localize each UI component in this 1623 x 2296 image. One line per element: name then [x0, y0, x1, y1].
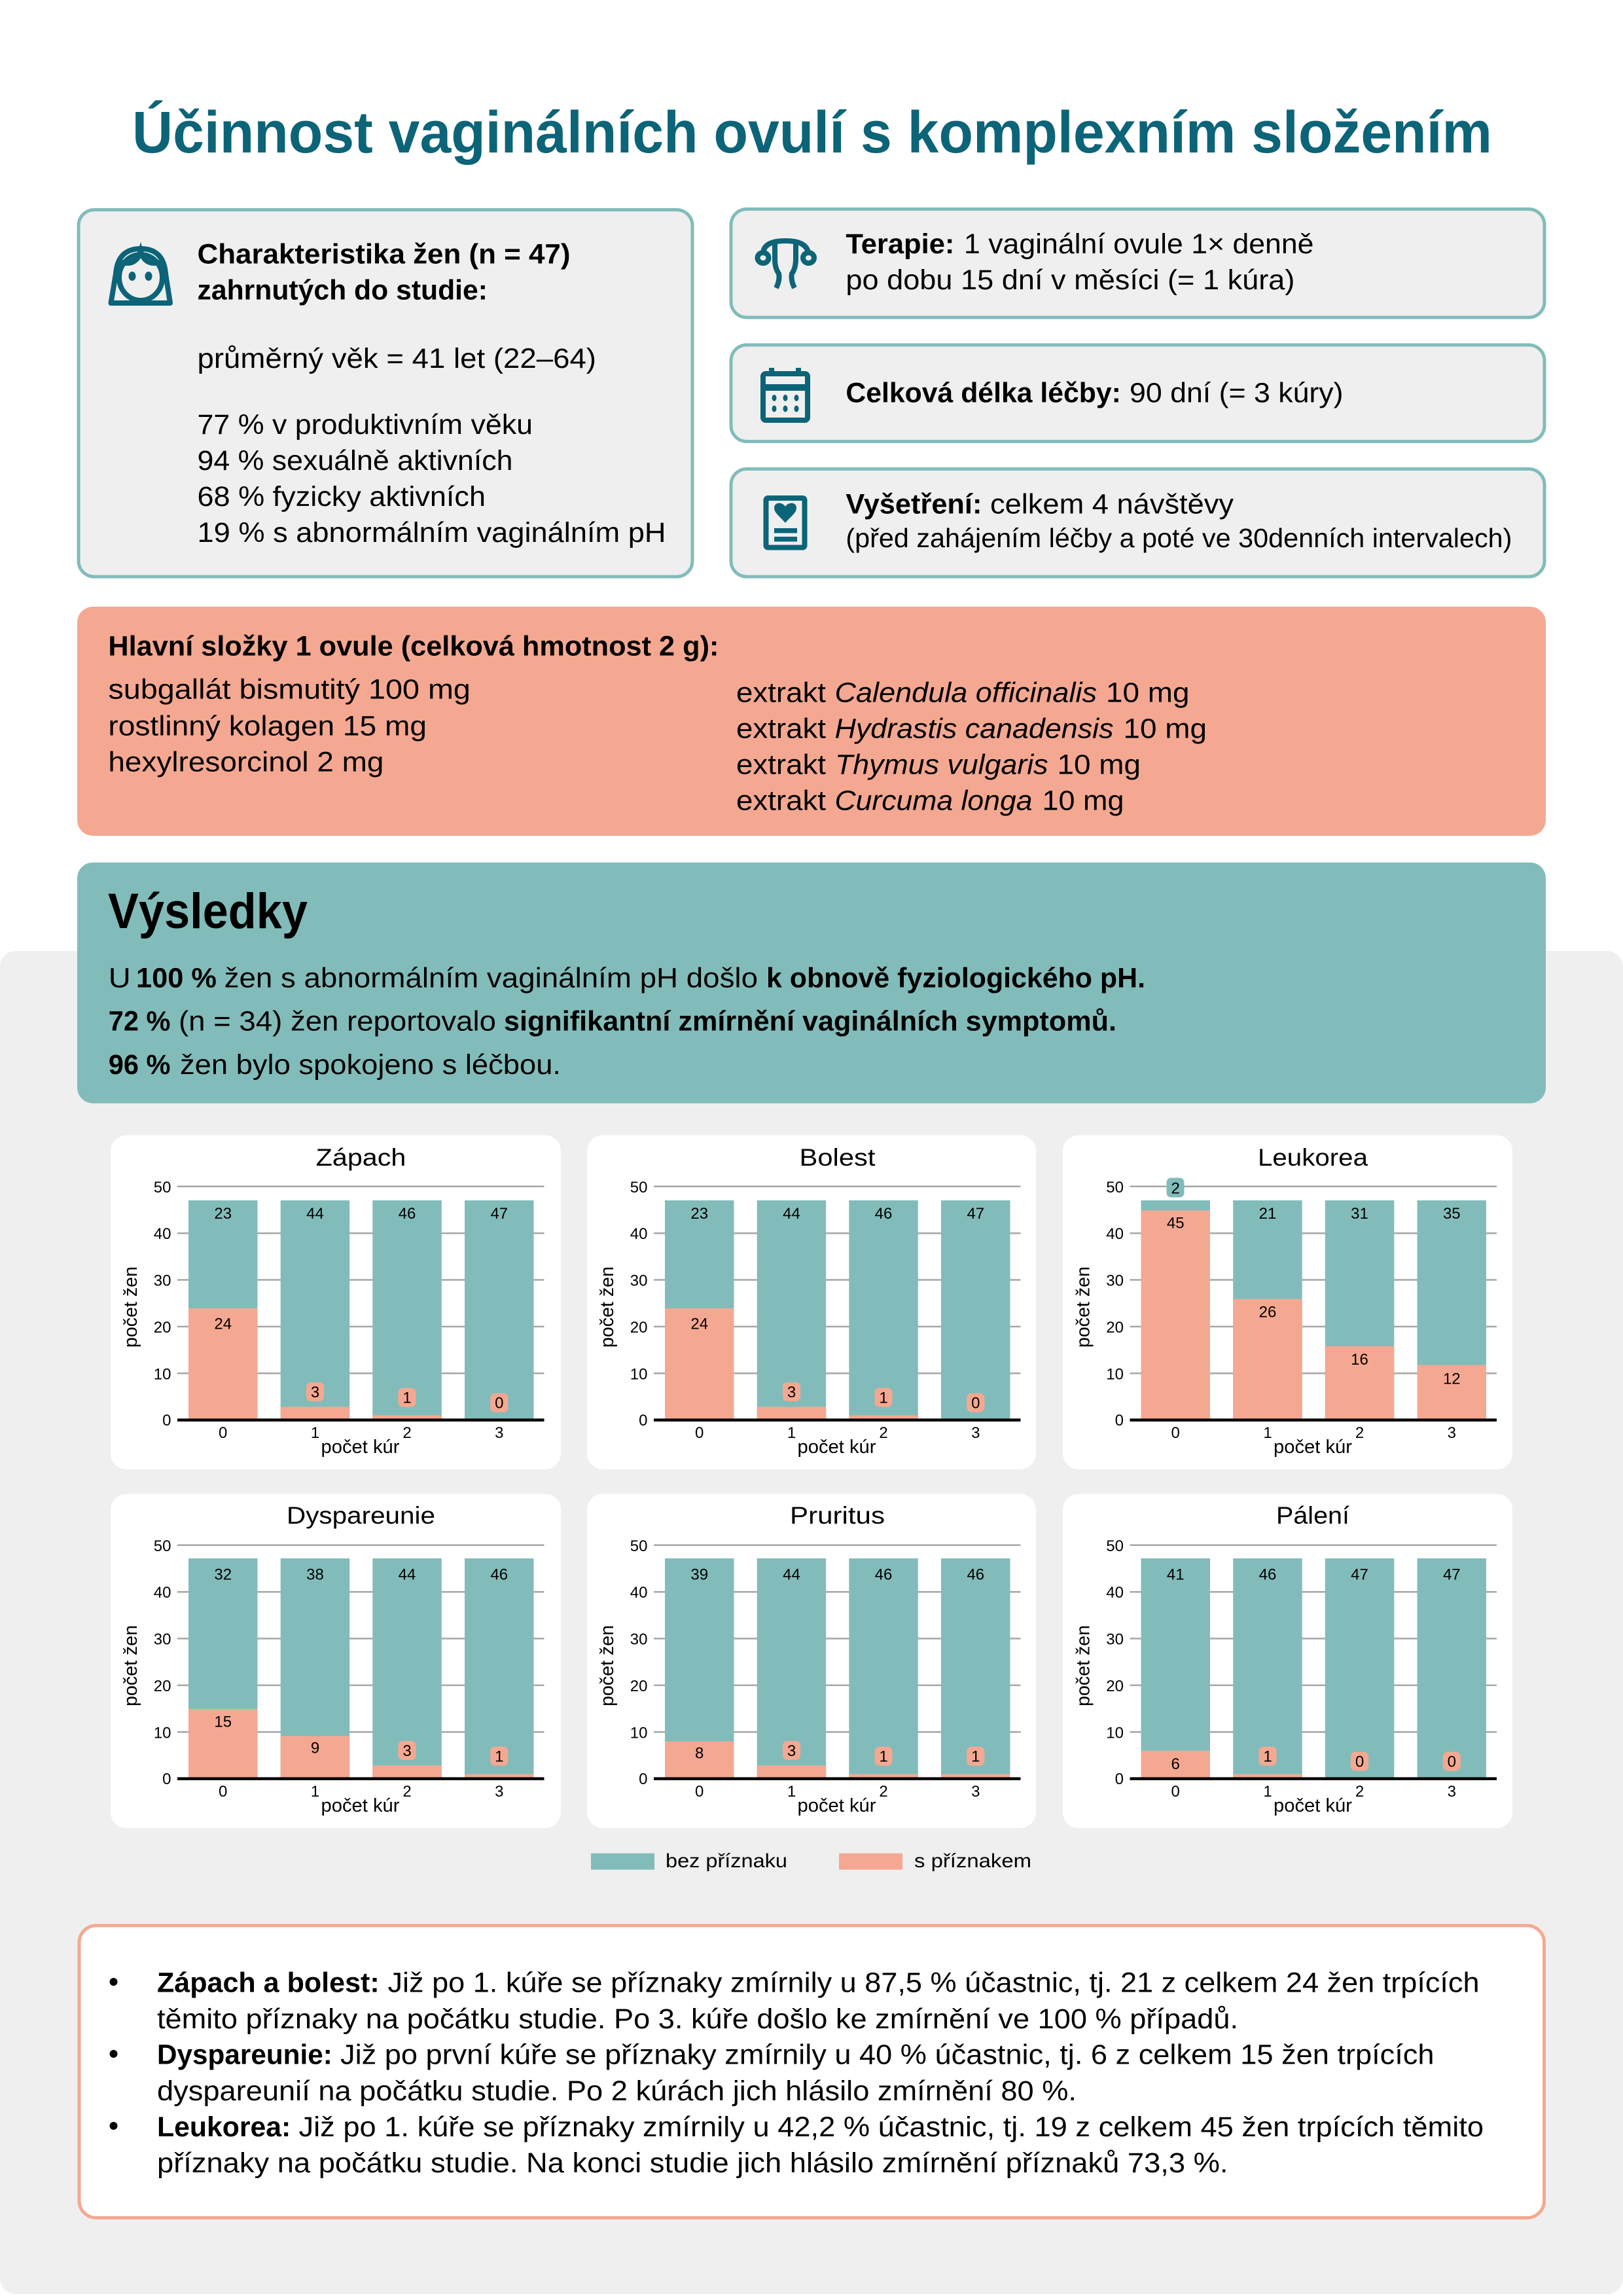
panel: therapy: [731, 209, 1544, 317]
chart: Zápach: 50: [154, 1179, 171, 1196]
chart: Pruritus: [587, 1494, 1036, 1828]
chart: Pruritus: 1: [971, 1748, 980, 1766]
chart: Pruritus: 44: [783, 1566, 800, 1584]
chart: Pruritus: 39: [690, 1566, 708, 1584]
chart: Pruritus: 2: [879, 1783, 888, 1801]
text: ingredients right column: extrakt: [736, 785, 826, 816]
text: average age: průměrný věk = 41 let (22–64): [198, 343, 596, 374]
chart: Zápach: počet kúr: [321, 1437, 400, 1458]
chart: Leukorea: 2: [1355, 1424, 1364, 1442]
chart: Zápach: 47: [490, 1205, 508, 1223]
bullet: odour and pain: těmito příznaky na počátku studie. Po 3. kúře došlo ke zmírnění ve 100 % případů.: [157, 2003, 1238, 2035]
chart: Pruritus: 3: [971, 1783, 980, 1801]
legend: [591, 1850, 1031, 1872]
text: satisfaction result: 96 %: [109, 1049, 170, 1081]
chart: Pálení: 0: [1171, 1783, 1180, 1801]
chart: Dyspareunie: 10: [154, 1724, 171, 1742]
legend: bez příznaku: [666, 1850, 787, 1872]
text: ingredients right column: Calendula officinalis: [835, 677, 1097, 708]
chart: Dyspareunie: 0: [219, 1783, 227, 1801]
text: ingredients right column: Curcuma longa: [835, 785, 1033, 816]
chart: Bolest: 24: [690, 1316, 708, 1333]
chart: Pruritus: Pruritus: [790, 1502, 885, 1529]
chart: Pálení: počet žen: [1073, 1625, 1094, 1706]
chart: Zápach: [111, 1135, 561, 1469]
chart: Leukorea: 40: [1106, 1225, 1124, 1243]
chart: Dyspareunie: 38: [306, 1566, 324, 1584]
text: ingredients right column: Hydrastis canadensis: [835, 713, 1114, 744]
chart: Zápach: 46: [399, 1205, 416, 1223]
text: examination: (před zahájením léčby a poté ve 30denních intervalech): [846, 523, 1512, 553]
chart: Pruritus: 10: [630, 1724, 648, 1742]
text: therapy: po dobu 15 dní v měsíci (= 1 kúra): [846, 264, 1294, 296]
chart: Leukorea: [1063, 1135, 1512, 1469]
bullet: odour and pain: Již po 1. kúře se příznaky zmírnily u 87,5 % účastnic, tj. 21 z celkem 24 žen trpících: [387, 1967, 1479, 1998]
chart: Dyspareunie: [111, 1494, 561, 1828]
chart: Dyspareunie: 0: [162, 1770, 171, 1788]
chart: Zápach: 1: [311, 1424, 319, 1442]
text: total length: [846, 378, 1343, 409]
bullet: odour and pain: [110, 1967, 1479, 2035]
chart: Pálení: 6: [1171, 1755, 1180, 1773]
chart: Bolest: 46: [875, 1205, 892, 1223]
chart: Bolest: počet kúr: [797, 1437, 876, 1458]
chart: Bolest: [587, 1135, 1036, 1469]
chart: Pálení: 30: [1106, 1631, 1124, 1648]
text: therapy: Terapie:: [846, 228, 954, 260]
chart: Zápach: Zápach: [316, 1144, 406, 1171]
chart: Bolest: 3: [971, 1424, 980, 1442]
chart: Pruritus: 46: [967, 1566, 984, 1584]
text: ingredients right column: extrakt: [736, 749, 826, 780]
text: percentages: 94 % sexuálně aktivních: [198, 445, 513, 476]
chart: Pálení: 0: [1115, 1770, 1124, 1788]
chart: Pruritus: 0: [695, 1783, 704, 1801]
chart: Bolest: 40: [630, 1225, 648, 1243]
chart: Pruritus: 46: [875, 1566, 892, 1584]
icon: woman: [111, 249, 170, 303]
icon: calendar: [763, 368, 808, 420]
chart: Dyspareunie: 50: [154, 1537, 171, 1555]
chart: Dyspareunie: počet žen: [120, 1625, 141, 1706]
chart: Pruritus: 50: [630, 1537, 648, 1555]
chart: Pálení: 46: [1259, 1566, 1276, 1584]
chart: Dyspareunie: 20: [154, 1677, 171, 1695]
chart: Pálení: Pálení: [1276, 1502, 1350, 1529]
chart: Leukorea: počet kúr: [1274, 1437, 1352, 1458]
bullet: dyspareunia: dyspareunií na počátku studie. Po 2 kúrách jich hlásilo zmírnění 80 %.: [157, 2075, 1077, 2107]
chart: Leukorea: 12: [1443, 1370, 1461, 1388]
bullet: leukorrhea: příznaky na počátku studie. Na konci studie jich hlásilo zmírnění příznaků 73,3 %.: [157, 2147, 1228, 2179]
panel: results: [77, 863, 1546, 1103]
chart: Pálení: počet kúr: [1274, 1795, 1352, 1816]
panel: examination: [731, 469, 1544, 577]
chart: Dyspareunie: Dyspareunie: [287, 1502, 435, 1529]
text: examination: Vyšetření:: [846, 488, 982, 520]
chart: Leukorea: 31: [1351, 1205, 1368, 1223]
chart: Bolest: 1: [787, 1424, 796, 1442]
chart: Zápach: 40: [154, 1225, 171, 1243]
text: total length: Celková délka léčby:: [846, 378, 1121, 409]
chart: Pálení: 50: [1106, 1537, 1124, 1555]
legend: s příznakem: [914, 1850, 1031, 1872]
chart: Zápach: 0: [219, 1424, 227, 1442]
chart: Bolest: 0: [971, 1395, 980, 1412]
heading: characteristics: Charakteristika žen (n = 47): [198, 239, 571, 270]
chart: Dyspareunie: počet kúr: [321, 1795, 400, 1816]
text: ingredients right column: 10 mg: [1058, 749, 1141, 780]
chart: Leukorea: 35: [1443, 1205, 1461, 1223]
chart: Zápach: 3: [495, 1424, 503, 1442]
grey background panel: [0, 951, 1623, 2294]
chart: Pálení: 1: [1263, 1783, 1272, 1801]
chart: Pálení: 1: [1263, 1748, 1272, 1766]
text: pH result: žen s abnormálním vaginálním pH došlo: [224, 962, 758, 994]
text: pH result: 100 %: [136, 962, 217, 994]
text: ingredients left column: subgallát bismutitý 100 mg: [108, 674, 471, 706]
chart: Zápach: 20: [154, 1319, 171, 1336]
chart: Dyspareunie: 3: [402, 1742, 412, 1760]
panel: characteristics of women: [79, 209, 692, 577]
chart: Dyspareunie: 46: [490, 1566, 508, 1584]
chart: Dyspareunie: 1: [495, 1748, 503, 1766]
chart: Bolest: 20: [630, 1319, 648, 1336]
chart: Pruritus: 20: [630, 1677, 648, 1695]
chart: Zápach: 23: [214, 1205, 232, 1223]
chart: Pálení: [1063, 1494, 1512, 1828]
text: pH result: k obnově fyziologického pH.: [766, 962, 1145, 994]
text: percentages: 77 % v produktivním věku: [198, 409, 533, 440]
chart: Leukorea: 16: [1351, 1351, 1368, 1369]
text: total length: 90 dní (= 3 kúry): [1130, 378, 1343, 409]
text: percentages: 68 % fyzicky aktivních: [198, 481, 486, 512]
chart: Bolest: 0: [695, 1424, 704, 1442]
chart: Bolest: 23: [690, 1205, 708, 1223]
chart: Bolest: 47: [967, 1205, 984, 1223]
chart: Zápach: 0: [495, 1395, 503, 1412]
chart: Zápach: 10: [154, 1365, 171, 1383]
chart: Zápach: počet žen: [120, 1266, 141, 1348]
chart: Dyspareunie: 1: [311, 1783, 319, 1801]
bullet: leukorrhea: Již po 1. kúře se příznaky zmírnily u 42,2 % účastnic, tj. 19 z celkem 45 žen trpících těmito: [298, 2111, 1484, 2143]
chart: Pruritus: 8: [695, 1745, 704, 1763]
text: ingredients right column: 10 mg: [1106, 677, 1190, 708]
chart: Leukorea: 26: [1259, 1304, 1276, 1321]
text: ingredients right column: 10 mg: [1123, 713, 1207, 744]
icon: uterus: [758, 241, 814, 288]
chart: Bolest: 50: [630, 1179, 648, 1196]
text: symptoms result: [109, 1005, 1116, 1037]
text: ingredients right column: 10 mg: [1042, 785, 1124, 816]
chart: Pálení: 20: [1106, 1677, 1124, 1695]
chart: Pálení: 0: [1448, 1753, 1456, 1771]
chart: Pálení: 47: [1443, 1566, 1461, 1584]
chart: Zápach: 44: [306, 1205, 324, 1223]
chart: Pálení: 40: [1106, 1584, 1124, 1602]
chart: Bolest: 10: [630, 1365, 648, 1383]
chart: Leukorea: 2: [1171, 1179, 1180, 1197]
chart: Pruritus: počet kúr: [797, 1795, 876, 1816]
chart: Leukorea: 45: [1167, 1215, 1185, 1232]
chart: Bolest: Bolest: [800, 1144, 876, 1171]
bullet: odour and pain: Zápach a bolest:: [157, 1967, 380, 1998]
panel: main ingredients: [77, 607, 1546, 836]
text: percentages: 19 % s abnormálním vaginálním pH: [198, 517, 666, 548]
text: pH result: [109, 962, 1145, 994]
chart: Bolest: 3: [787, 1384, 796, 1401]
bullet: leukorrhea: [110, 2111, 1484, 2179]
chart: Leukorea: počet žen: [1073, 1266, 1094, 1348]
heading: ingredients: Hlavní složky 1 ovule (celková hmotnost 2 g):: [108, 631, 719, 662]
chart: Leukorea: 50: [1106, 1179, 1124, 1196]
heading: characteristics: [198, 239, 571, 306]
chart: Leukorea: 0: [1115, 1412, 1124, 1429]
chart: Pálení: 3: [1448, 1783, 1456, 1801]
chart: Pruritus: 3: [787, 1742, 796, 1760]
chart: Pálení: 2: [1355, 1783, 1364, 1801]
chart: Zápach: 1: [402, 1390, 412, 1407]
chart: Bolest: počet žen: [597, 1266, 618, 1348]
chart: Leukorea: 1: [1263, 1424, 1272, 1442]
icon: medical report: [766, 498, 805, 547]
text: ingredients right column: extrakt: [736, 677, 826, 708]
chart: Leukorea: 0: [1171, 1424, 1180, 1442]
text: percentages: [198, 409, 666, 548]
chart: Dyspareunie: 9: [311, 1740, 319, 1757]
panel: total treatment length: [731, 345, 1544, 441]
chart: Zápach: 3: [311, 1384, 319, 1401]
chart: Leukorea: 10: [1106, 1365, 1124, 1383]
chart: Dyspareunie: 44: [399, 1566, 416, 1584]
chart: Zápach: 0: [162, 1412, 171, 1429]
chart: Dyspareunie: 32: [214, 1566, 232, 1584]
chart: Pruritus: 40: [630, 1584, 648, 1602]
chart: Leukorea: 21: [1259, 1205, 1276, 1223]
chart: Pálení: 0: [1355, 1753, 1364, 1771]
chart: Leukorea: 30: [1106, 1272, 1124, 1289]
text: pH result: U: [109, 962, 131, 994]
text: ingredients right column: Thymus vulgaris: [835, 749, 1048, 780]
chart: Dyspareunie: 3: [495, 1783, 503, 1801]
text: examination: celkem 4 návštěvy: [990, 488, 1234, 520]
chart: Bolest: 30: [630, 1272, 648, 1289]
chart: Zápach: 30: [154, 1272, 171, 1289]
chart: Dyspareunie: 40: [154, 1584, 171, 1602]
chart: Bolest: 2: [879, 1424, 888, 1442]
chart: Leukorea: Leukorea: [1258, 1144, 1368, 1171]
chart: Dyspareunie: 15: [214, 1713, 232, 1731]
chart: Dyspareunie: 2: [402, 1783, 412, 1801]
text: symptoms result: signifikantní zmírnění vaginálních symptomů.: [504, 1005, 1116, 1037]
heading: characteristics: zahrnutých do studie:: [198, 275, 488, 306]
heading: results: Výsledky: [108, 884, 308, 939]
bullet: dyspareunia: [110, 2039, 1435, 2107]
text: satisfaction result: žen bylo spokojeno s léčbou.: [180, 1049, 561, 1081]
chart: Pruritus: 30: [630, 1631, 648, 1648]
text: therapy: 1 vaginální ovule 1× denně: [964, 228, 1314, 260]
chart: Pálení: 47: [1351, 1566, 1368, 1584]
chart: Pruritus: 0: [639, 1770, 648, 1788]
text: examination: [846, 488, 1512, 553]
chart: Pruritus: počet žen: [597, 1625, 618, 1706]
text: ingredients left column: hexylresorcinol 2 mg: [108, 746, 383, 778]
chart: Pruritus: 1: [879, 1748, 888, 1766]
chart: Leukorea: 20: [1106, 1319, 1124, 1336]
text: ingredients left column: rostlinný kolagen 15 mg: [108, 710, 427, 742]
chart: Zápach: 2: [402, 1424, 412, 1442]
chart: Bolest: 0: [639, 1412, 648, 1429]
chart: Bolest: 1: [879, 1390, 888, 1407]
chart: Leukorea: 3: [1448, 1424, 1456, 1442]
chart: Pálení: 10: [1106, 1724, 1124, 1742]
text: symptoms result: 72 %: [109, 1005, 170, 1037]
bullet: dyspareunia: Již po první kúře se příznaky zmírnily u 40 % účastnic, tj. 6 z celkem 15 žen trpících: [340, 2039, 1435, 2070]
text: therapy: [846, 228, 1314, 296]
text: ingredients left column: [108, 674, 471, 778]
title: Účinnost vaginálních ovulí s komplexním složením: [132, 99, 1492, 166]
chart: Bolest: 44: [783, 1205, 800, 1223]
bullet: dyspareunia: Dyspareunie:: [157, 2039, 332, 2070]
text: symptoms result: (n = 34) žen reportovalo: [179, 1005, 496, 1037]
text: ingredients right column: extrakt: [736, 713, 826, 744]
panel: summary bullets: [79, 1926, 1544, 2217]
text: ingredients right column: [736, 677, 1207, 816]
chart: Pruritus: 1: [787, 1783, 796, 1801]
chart: Dyspareunie: 30: [154, 1631, 171, 1648]
chart: Pálení: 41: [1167, 1566, 1185, 1584]
bullet: leukorrhea: Leukorea:: [157, 2111, 291, 2143]
chart: Zápach: 24: [214, 1316, 232, 1333]
